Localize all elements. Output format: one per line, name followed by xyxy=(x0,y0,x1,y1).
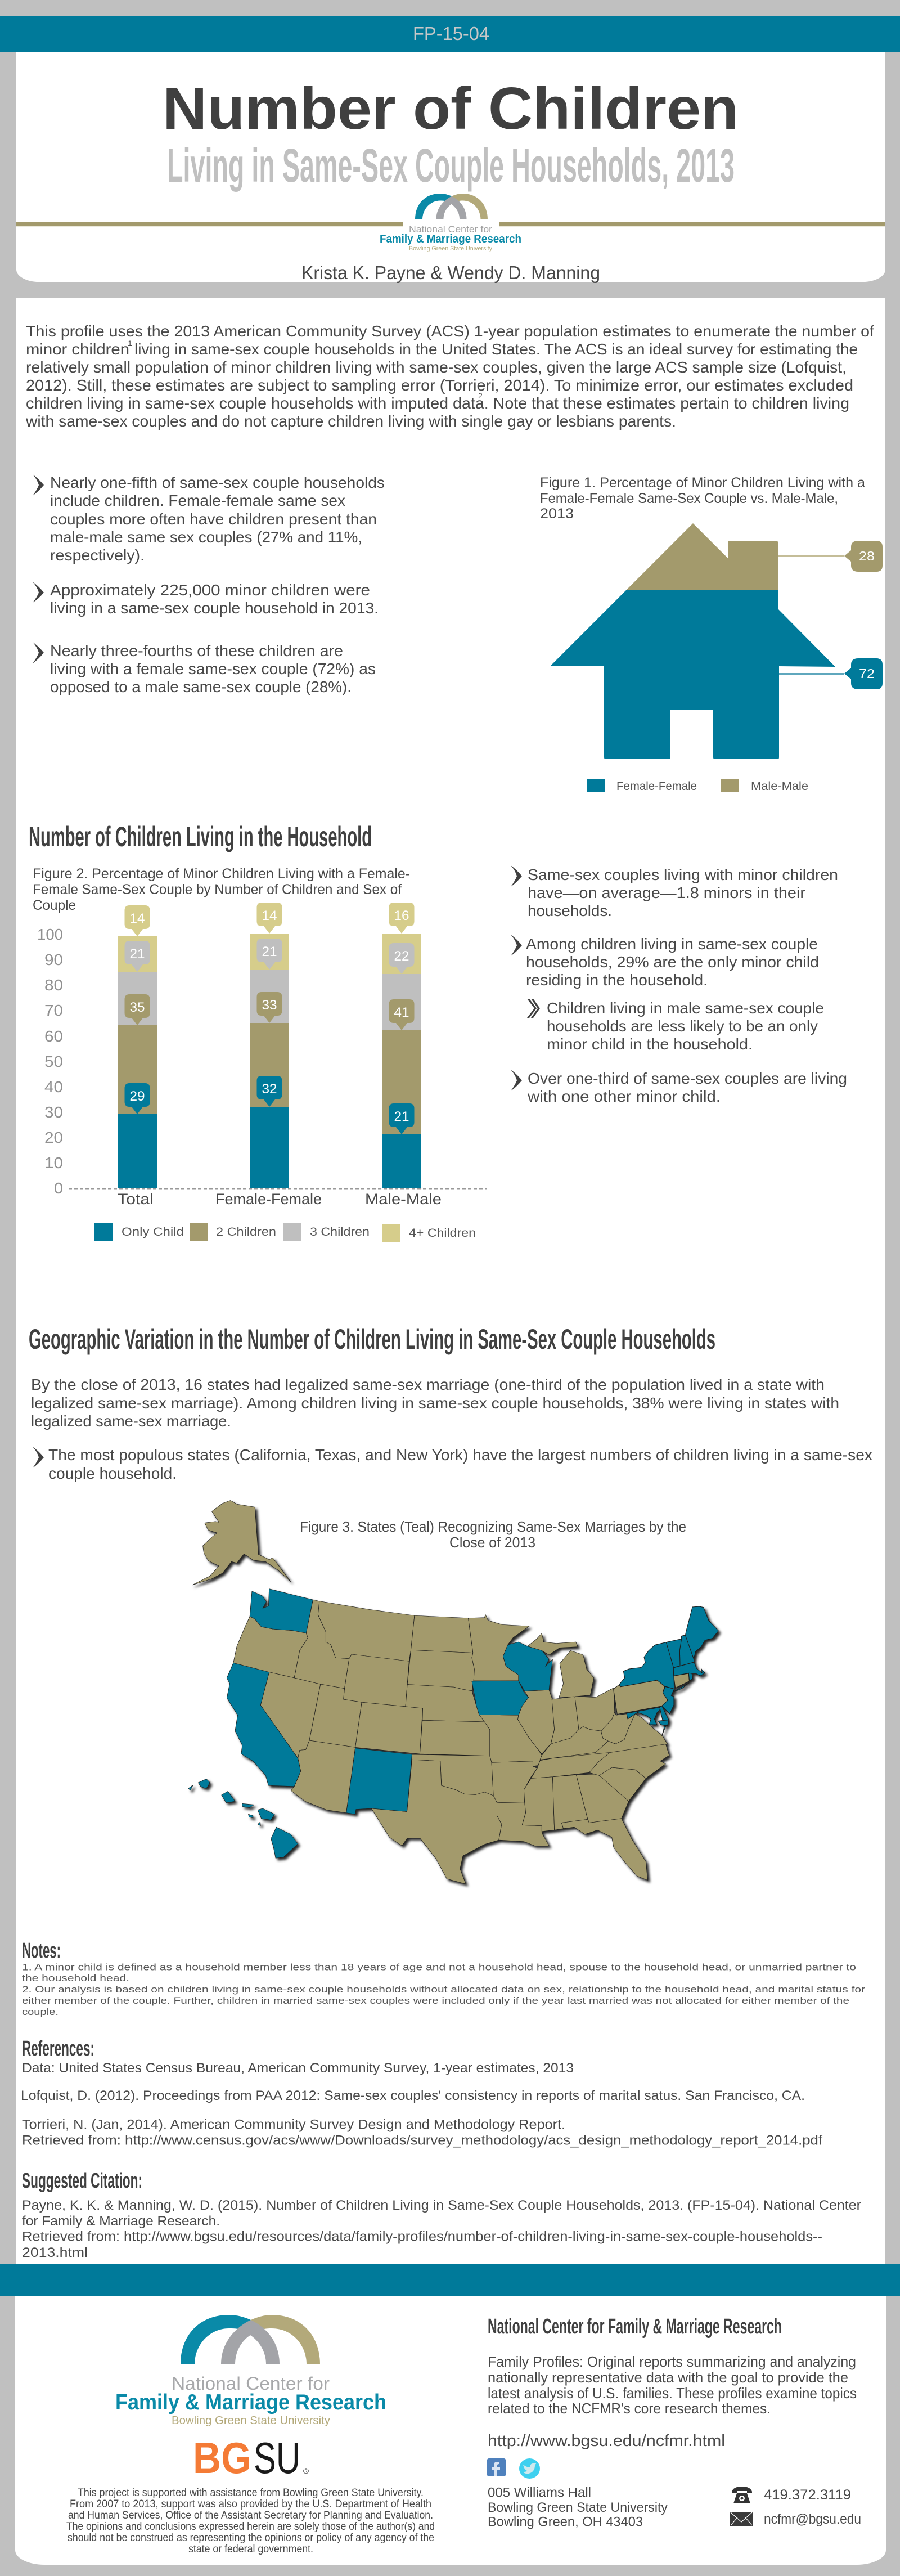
x axis labels: Male-Male xyxy=(365,1191,442,1208)
icon: footer logo xyxy=(115,2315,386,2427)
intro paragraph: living in same-sex couple households in the United States. The ACS is an ideal survey for estimating the xyxy=(134,340,858,358)
icon: BGSU logo: ® xyxy=(303,2466,309,2475)
bullet: 225,000: Approximately 225,000 minor children were xyxy=(50,581,370,599)
bullet: one-fifth: couples more often have children present than xyxy=(50,510,377,528)
sub-bullet: male households xyxy=(527,999,824,1053)
y axis labels: 20 xyxy=(44,1129,63,1146)
bullet: one-fifth: respectively). xyxy=(50,546,145,564)
bullet: 225,000 xyxy=(33,581,379,617)
bullet: 1.8 minors: have—on average—1.8 minors in their xyxy=(528,884,806,901)
bullet: one-fifth: male-male same sex couples (27% and 11%, xyxy=(50,528,362,546)
legend: figure 2: 4+ Children xyxy=(409,1227,476,1240)
callout: female-female 33 xyxy=(256,992,282,1023)
icon: header logo: Family & Marriage Research xyxy=(380,233,521,245)
address: Bowling Green State University xyxy=(488,2500,668,2515)
legend: figure 1: Male-Male xyxy=(751,780,808,793)
panel: header xyxy=(0,16,900,283)
figure 2 caption: Female Same-Sex Couple by Number of Children and Sex of xyxy=(33,882,402,897)
map: states recognizing same-sex marriage xyxy=(188,1501,718,1884)
chart: figure 2 stacked bars xyxy=(33,866,487,1242)
bullet: three-fourths: opposed to a male same-sex couple (28%). xyxy=(50,678,352,695)
y axis labels: 0 xyxy=(54,1179,63,1197)
legend: figure 2: Only Child xyxy=(122,1226,184,1238)
y axis labels: 10 xyxy=(44,1154,63,1172)
notes: 1. A minor child is defined as a household member less than 18 years of age and not a household head, spouse to the household head, or unmarried partner to xyxy=(22,1962,856,1973)
address: Bowling Green, OH 43403 xyxy=(488,2514,643,2530)
bullet: three-fourths xyxy=(33,642,376,695)
suggested citation xyxy=(22,2169,861,2260)
callout: 28 xyxy=(778,541,883,572)
notes: 2. Our analysis is based on children living in same-sex couple households without allocated data on sex, relationship to the household head, and marital status for xyxy=(22,1984,865,1995)
bullet: populous states: The most populous states (California, Texas, and New York) have the largest numbers of children living in a same-sex xyxy=(48,1446,872,1464)
y axis labels: 60 xyxy=(44,1027,63,1045)
bullet: three-fourths: living with a female same-sex couple (72%) as xyxy=(50,660,376,677)
icon: BGSU logo: BG xyxy=(193,2433,251,2483)
legend: figure 1: Female-Female xyxy=(616,780,697,793)
authors: Krista K. Payne & Wendy D. Manning xyxy=(302,262,600,283)
callout: male-male 16 xyxy=(389,903,414,934)
bullet: only minor child: households, 29% are the only minor child xyxy=(526,953,819,971)
notes: couple. xyxy=(22,2007,58,2017)
email: ncfmr@bgsu.edu xyxy=(764,2511,861,2527)
intro paragraph: relatively small population of minor children living with same-sex couples, given the large ACS sample size (Lofquist, xyxy=(26,358,847,376)
callout: total 21: 21 xyxy=(129,946,145,962)
figure 1 caption: Figure 1. Percentage of Minor Children Living with a xyxy=(540,475,865,491)
center description: related to the NCFMR's core research themes. xyxy=(488,2400,771,2417)
icon: footer logo: National Center for xyxy=(172,2373,330,2394)
y axis labels: 40 xyxy=(44,1078,63,1096)
chart: figure 1 house xyxy=(540,475,883,793)
references: Data: United States Census Bureau, American Community Survey, 1-year estimates, 2013 xyxy=(22,2061,574,2076)
y axis labels: 90 xyxy=(44,951,63,968)
center description xyxy=(488,2353,857,2417)
suggested citation: 2013.html xyxy=(22,2245,88,2260)
bar: female-female xyxy=(250,903,289,1188)
x axis labels: Total xyxy=(118,1191,154,1208)
y axis labels: 100 xyxy=(37,926,63,943)
intro paragraph: 2 xyxy=(478,391,483,400)
icon: twitter xyxy=(519,2458,540,2479)
suggested citation: Payne, K. K. & Manning, W. D. (2015). Number of Children Living in Same-Sex Couple Households, 2013. (FP-15-04). National Center xyxy=(22,2198,861,2213)
top banner: FP-15-04 xyxy=(413,23,489,44)
callout: female-female 14 xyxy=(256,903,282,934)
callout: total 35 xyxy=(125,994,150,1025)
x axis labels: Female-Female xyxy=(215,1191,322,1208)
bullet: three-fourths: Nearly three-fourths of these children are xyxy=(50,642,343,659)
geographic paragraph: By the close of 2013, 16 states had legalized same-sex marriage (one-third of the population lived in a state with xyxy=(31,1376,825,1393)
center description: Family Profiles: Original reports summarizing and analyzing xyxy=(488,2353,856,2370)
bullet: one-fifth: include children. Female-female same sex xyxy=(50,492,345,509)
suggested citation: Suggested Citation: xyxy=(22,2169,142,2193)
center description: latest analysis of U.S. families. These profiles examine topics xyxy=(488,2385,857,2402)
geographic paragraph: legalized same-sex marriage. xyxy=(31,1412,231,1430)
intro paragraph: with same-sex couples and do not capture children living with single gay or lesbians parents. xyxy=(25,412,676,430)
intro paragraph: This profile uses the 2013 American Community Survey (ACS) 1-year population estimates to enumerate the number of xyxy=(26,322,874,340)
icon: header logo xyxy=(380,194,521,252)
icon: header logo: National Center for xyxy=(409,224,492,235)
bullet: one-third xyxy=(511,1070,847,1105)
callout: female-female 32 xyxy=(256,1076,282,1107)
bullet: populous states xyxy=(33,1446,872,1482)
callout: female-female 32: 32 xyxy=(262,1081,277,1097)
icon: facebook xyxy=(487,2458,506,2476)
funding statement: state or federal government. xyxy=(188,2543,313,2555)
icon: BGSU logo xyxy=(193,2433,309,2483)
callout: total 29: 29 xyxy=(129,1089,145,1104)
geographic paragraph xyxy=(31,1376,839,1430)
bullet: 1.8 minors: households. xyxy=(528,902,612,919)
funding statement: From 2007 to 2013, support was also provided by the U.S. Department of Health xyxy=(70,2498,431,2510)
phone number: 419.372.3119 xyxy=(764,2487,851,2503)
notes xyxy=(22,1939,865,2017)
figure 1 caption: Female-Female Same-Sex Couple vs. Male-Male, xyxy=(540,491,838,506)
funding statement: should not be construed as representing the opinions or policy of any agency of the xyxy=(68,2532,434,2544)
funding statement: This project is supported with assistance from Bowling Green State University. xyxy=(78,2487,424,2499)
references: Retrieved from: http://www.census.gov/acs/www/Downloads/survey_methodology/acs_design_methodology_report_2014.pdf xyxy=(22,2133,822,2148)
callout: 28: 28 xyxy=(859,549,875,563)
y axis labels: 50 xyxy=(44,1053,63,1070)
bullet: one-third: Over one-third of same-sex couples are living xyxy=(528,1070,847,1087)
callout: female-female 33: 33 xyxy=(262,998,277,1013)
callout: total 35: 35 xyxy=(129,1000,145,1015)
callout: total 21 xyxy=(125,941,150,972)
figure 2 caption xyxy=(33,866,410,913)
references: Lofquist, D. (2012). Proceedings from PAA 2012: Same-sex couples' consistency in reports of marital satus. San Francisco, CA. xyxy=(21,2088,805,2103)
y axis labels xyxy=(37,926,63,1197)
bullet: 1.8 minors: Same-sex couples living with minor children xyxy=(528,866,838,883)
notes: either member of the couple. Further, children in married same-sex couples were included only if the year last married was not allocated for either member of the xyxy=(22,1995,849,2006)
bar: male-male xyxy=(382,903,421,1188)
x axis labels xyxy=(118,1191,442,1208)
y axis labels: 70 xyxy=(44,1002,63,1019)
map: teal states west and midwest xyxy=(188,1589,552,1858)
callout: female-female 21 xyxy=(256,939,282,970)
y axis labels: 80 xyxy=(44,976,63,994)
icon: header logo: Bowling Green State University xyxy=(409,245,492,252)
callout: male-male 22: 22 xyxy=(394,949,410,964)
panel: footer xyxy=(15,2296,886,2565)
bullet: one-third: with one other minor child. xyxy=(527,1088,721,1105)
callout: 72 xyxy=(779,658,883,689)
website: http://www.bgsu.edu/ncfmr.html xyxy=(488,2432,725,2450)
callout: male-male 16: 16 xyxy=(394,908,410,923)
bullet: one-fifth xyxy=(33,474,385,564)
address xyxy=(488,2485,668,2530)
address: 005 Williams Hall xyxy=(488,2485,591,2501)
figure 1 caption xyxy=(540,475,865,522)
bullet: populous states: couple household. xyxy=(48,1465,177,1482)
figure 3 caption: Close of 2013 xyxy=(449,1534,536,1551)
callout: female-female 14: 14 xyxy=(262,908,277,923)
intro paragraph: children living in same-sex couple households with imputed data. Note that these estimates pertain to children living xyxy=(26,394,849,412)
bullets: household findings xyxy=(511,865,847,1105)
bottom banner xyxy=(0,2264,900,2296)
figure 2 caption: Figure 2. Percentage of Minor Children Living with a Female- xyxy=(33,866,410,882)
callout: 72: 72 xyxy=(859,666,875,681)
callout: total 14: 14 xyxy=(129,911,145,926)
legend: figure 2: 3 Children xyxy=(310,1226,370,1238)
icon: telephone xyxy=(732,2487,752,2503)
bullet: only minor child: residing in the household. xyxy=(526,971,708,989)
sub-bullet: male households: Children living in male same-sex couple xyxy=(547,999,824,1017)
sub-bullet: male households: minor child in the household. xyxy=(547,1035,753,1053)
callout: male-male 41: 41 xyxy=(394,1005,410,1020)
funding statement: The opinions and conclusions expressed herein are solely those of the author(s) and xyxy=(66,2521,435,2533)
panel: main body xyxy=(16,298,885,2264)
legend: figure 2 xyxy=(94,1223,476,1242)
divider line xyxy=(16,219,885,228)
title: Number of Children xyxy=(163,75,739,142)
callout: male-male 41 xyxy=(389,999,414,1030)
sub-bullet: male households: households are less likely to be an only xyxy=(547,1017,818,1035)
figure 3 caption: Figure 3. States (Teal) Recognizing Same-Sex Marriages by the xyxy=(300,1518,686,1535)
legend: figure 2: 2 Children xyxy=(216,1226,276,1238)
icon: BGSU logo: SU xyxy=(254,2433,300,2483)
bullet: 1.8 minors xyxy=(511,865,838,919)
intro paragraph: minor children xyxy=(26,340,129,358)
geographic paragraph: legalized same-sex marriage). Among children living in same-sex couple households, 38% were living in states with xyxy=(31,1394,839,1412)
bullet: one-fifth: Nearly one-fifth of same-sex couple households xyxy=(50,474,385,491)
bar: total xyxy=(118,905,157,1188)
notes: the household head. xyxy=(22,1973,129,1983)
icon: footer logo: Bowling Green State University xyxy=(172,2415,330,2427)
figure 1 caption: 2013 xyxy=(540,506,574,522)
bullet: 225,000: living in a same-sex couple household in 2013. xyxy=(50,599,379,617)
house: female-female share xyxy=(550,590,835,759)
funding statement xyxy=(66,2487,435,2555)
suggested citation: Retrieved from: http://www.bgsu.edu/resources/data/family-profiles/number-of-children-living-in-same-sex-couple-households-- xyxy=(22,2229,822,2244)
callout: total 29 xyxy=(125,1083,150,1114)
intro paragraph xyxy=(25,322,874,430)
legend: figure 1 xyxy=(587,779,808,793)
references: Torrieri, N. (Jan, 2014). American Community Survey Design and Methodology Report. xyxy=(22,2117,565,2133)
bullet: only minor child xyxy=(511,935,819,989)
y axis labels: 30 xyxy=(44,1103,63,1121)
funding statement: and Human Services, Office of the Assistant Secretary for Planning and Evaluation. xyxy=(68,2510,433,2521)
top banner xyxy=(0,16,900,52)
map: northeast states xyxy=(614,1606,718,1736)
map: tan states xyxy=(192,1501,669,1884)
center description: nationally representative data with the goal to provide the xyxy=(488,2369,848,2386)
suggested citation: for Family & Marriage Research. xyxy=(22,2214,220,2229)
figure 2 caption: Couple xyxy=(33,897,76,913)
figure 3 caption xyxy=(300,1518,686,1551)
intro paragraph: 1 xyxy=(128,339,132,348)
callout: male-male 21 xyxy=(389,1103,414,1134)
icon: footer logo: Family & Marriage Research xyxy=(115,2390,386,2415)
bullets: overview xyxy=(33,474,385,695)
heading: number of children: Number of Children Living in the Household xyxy=(29,821,372,852)
bullet: only minor child: Among children living in same-sex couple xyxy=(526,935,818,953)
intro paragraph: 2012). Still, these estimates are subject to sampling error (Torrieri, 2014). To minimize error, our estimates excluded xyxy=(26,376,853,394)
icon: envelope xyxy=(730,2512,753,2526)
callout: female-female 21: 21 xyxy=(262,944,277,959)
references: References: xyxy=(22,2037,94,2061)
callout: total 14 xyxy=(125,905,150,936)
callout: male-male 21: 21 xyxy=(394,1109,410,1124)
house: male-male share xyxy=(627,523,778,590)
callout: male-male 22 xyxy=(389,943,414,974)
references xyxy=(21,2037,822,2148)
notes: Notes: xyxy=(22,1939,61,1963)
